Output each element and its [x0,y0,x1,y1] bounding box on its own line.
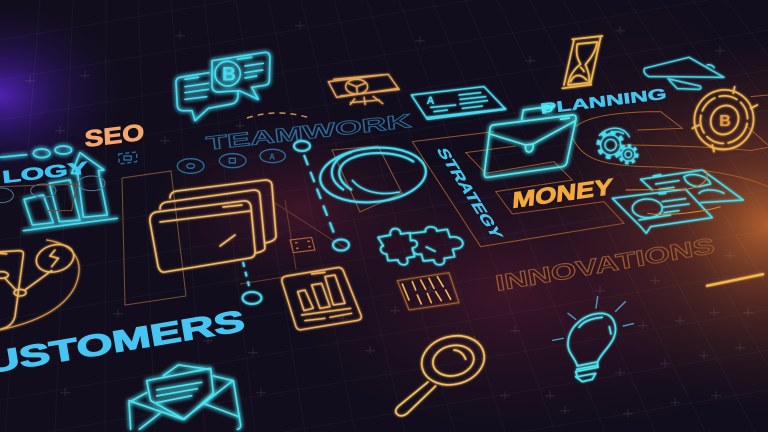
connector: lower dashed cyan line with node [242,262,262,304]
connector: dashed cyan line with nodes [294,141,349,250]
heading: PLANNING: PLANNING [539,86,668,118]
icon: small dim circles row [119,149,285,173]
icon: gears [598,128,637,163]
heading: SEO: SEO [84,119,145,152]
thin orange diagonal line from folders [240,200,345,284]
icon: network tablet (left edge) [0,240,79,331]
icon: light bulb [568,313,615,382]
icon: presentation board [328,74,400,105]
icon: envelope with letter [129,365,241,429]
heading: STRATEGY: STRATEGY [432,147,506,239]
icon: profile cards [612,170,743,233]
icon: stripe panel [397,273,459,310]
heading: MONEY: MONEY [512,174,614,213]
bulb rays [553,297,633,340]
icon: dashed arc [247,113,310,118]
heading: TEAMWORK: TEAMWORK [205,111,413,155]
icon: bar chart with arrow [0,146,117,231]
icon: bitcoin target: B [719,113,731,130]
thin orange overlay on cards [626,170,721,214]
icon: bitcoin target [683,78,765,161]
icon: folder stack [150,180,276,272]
thin orange plates behind money [412,132,624,247]
thin orange flow line [572,95,768,187]
accent line [706,274,764,286]
dim overlay circles behind bar chart [0,176,105,211]
icon: document card: A [427,95,435,107]
icon: briefcase [484,106,576,177]
icon: tablet with bar chart [282,268,361,330]
heading: INNOVATIONS: INNOVATIONS [494,233,716,296]
thin orange frame behind rings [332,146,402,212]
icon: magnifier [396,329,490,416]
icon: chat bubbles with bitcoin: B [222,65,236,86]
stripes in panel [402,277,451,304]
icon: small dim circles row: A [269,152,275,161]
icon: document card [411,87,506,119]
heading: LOGY: LOGY [1,158,90,187]
icon: small orange square [290,237,315,253]
icon: concentric rings [318,143,428,207]
icon: chat bubbles with bitcoin [176,52,270,121]
thin orange frame behind folders [122,171,186,305]
icon: megaphone [644,57,724,89]
icon: hourglass [562,36,602,88]
icon: puzzle pieces [378,227,463,265]
